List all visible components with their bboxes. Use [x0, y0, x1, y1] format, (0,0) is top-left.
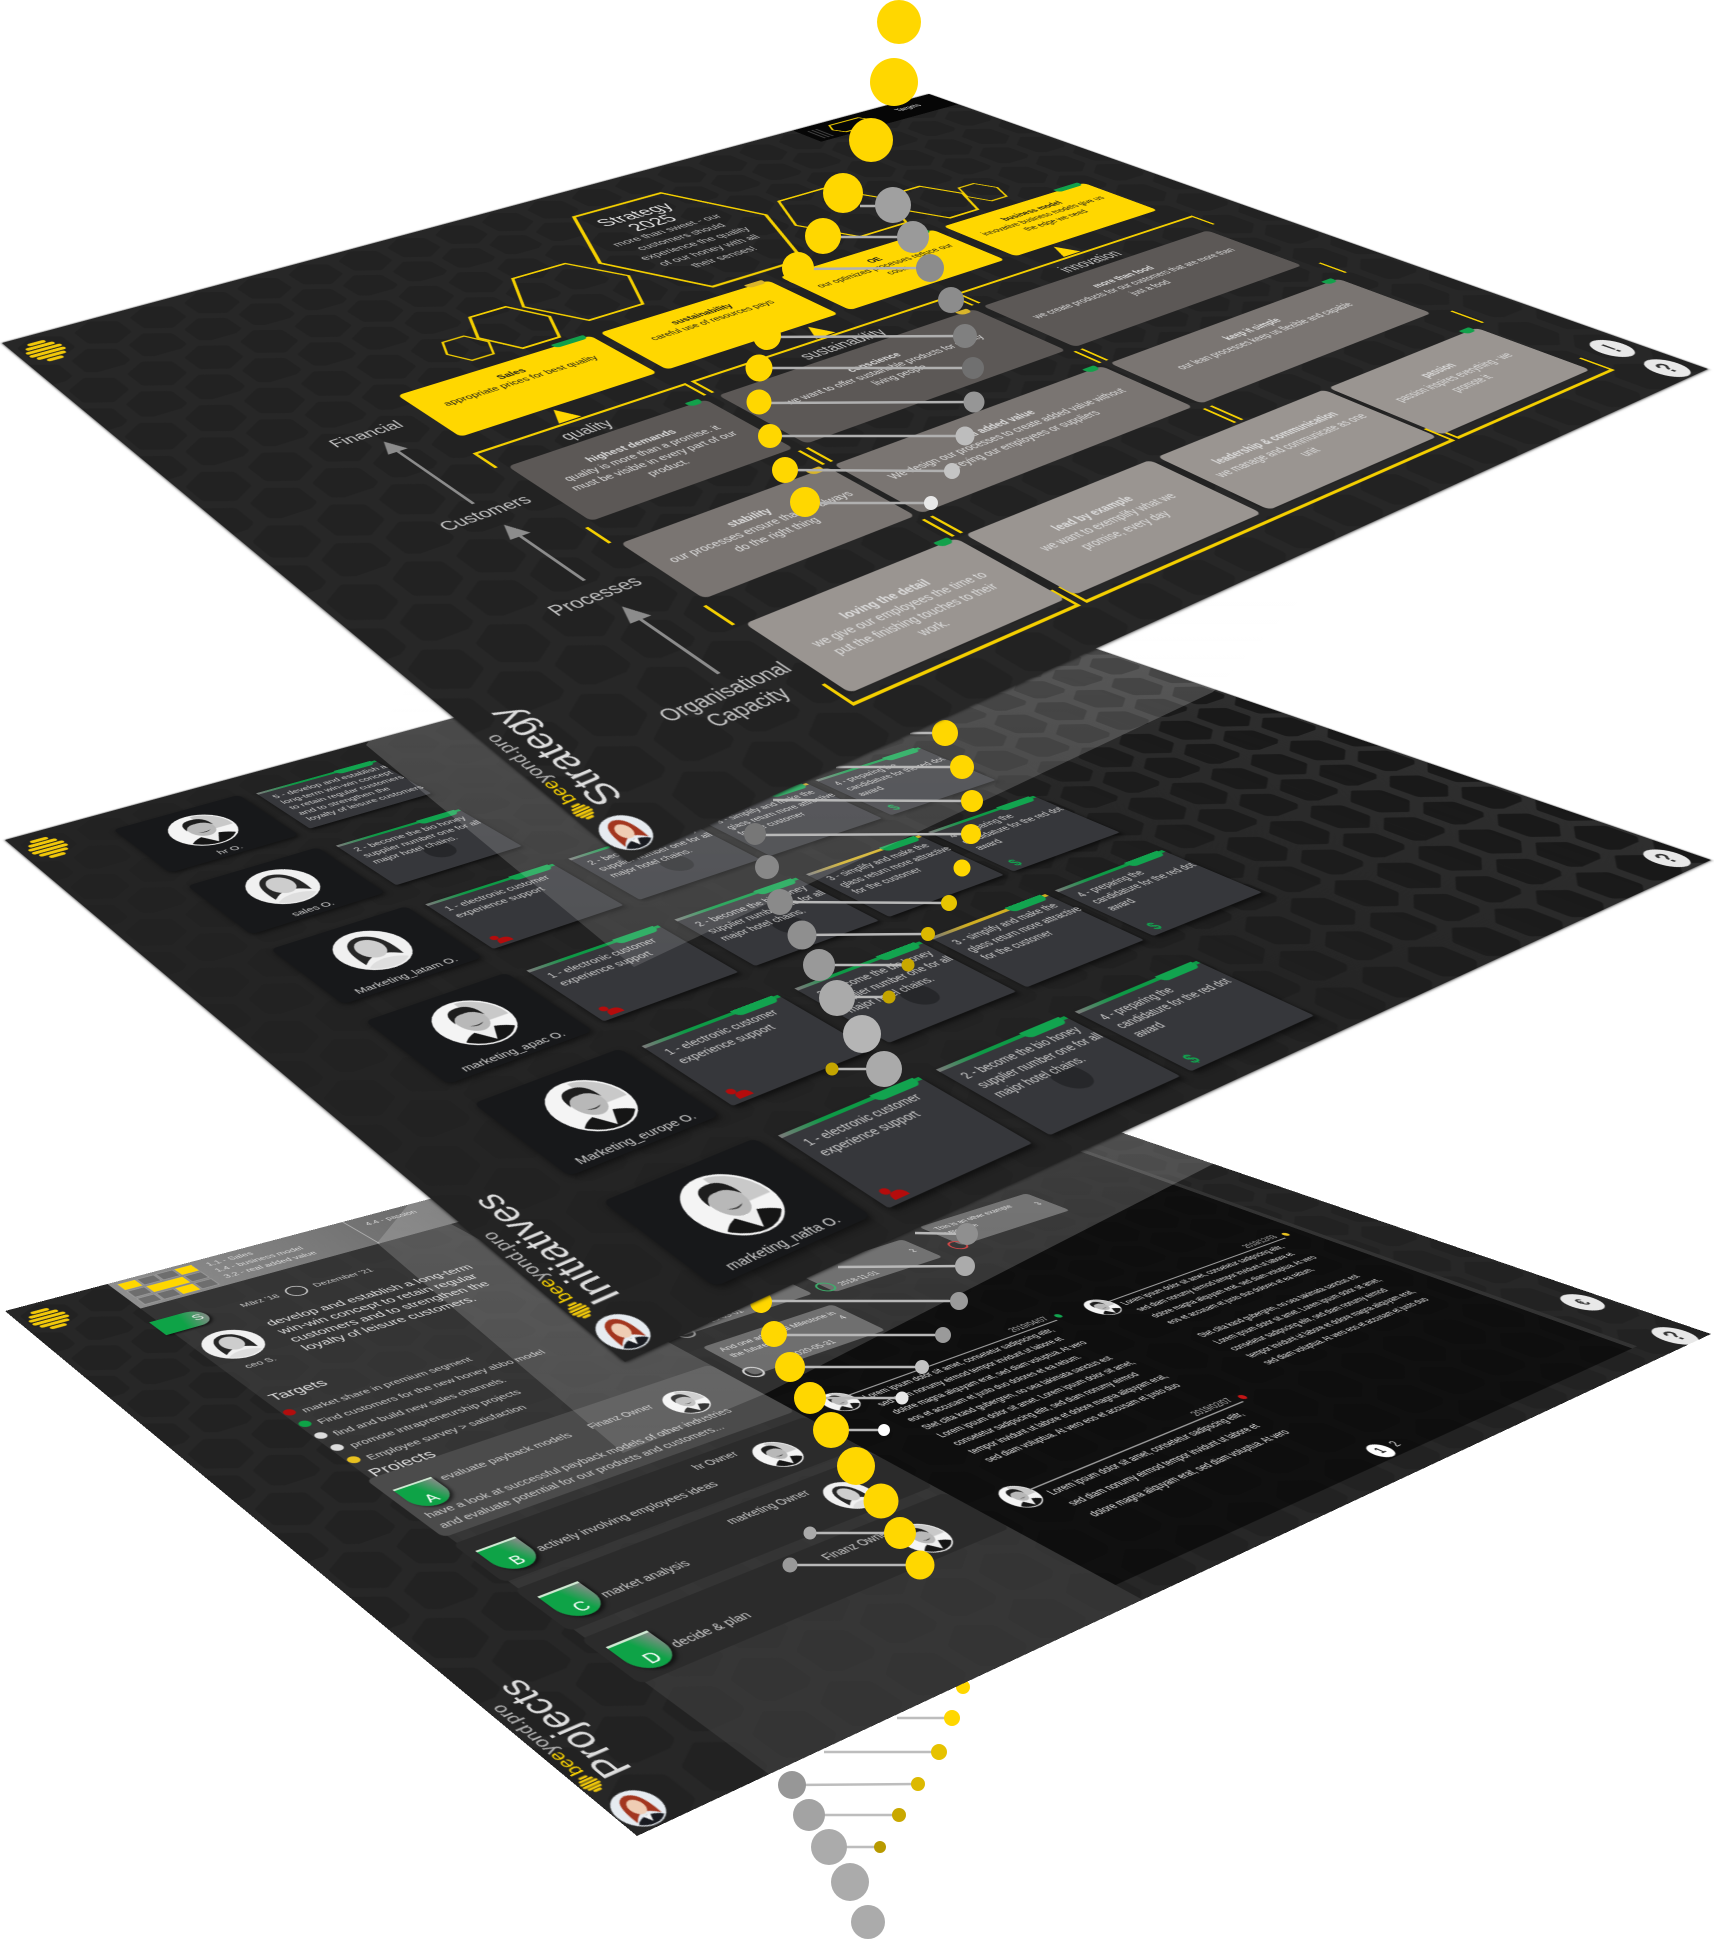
column label: sustainability: sustainability: [794, 327, 891, 362]
card: sales bio honey: [336, 809, 522, 885]
tab A: A: [420, 1491, 444, 1505]
card: OE: costs: [883, 265, 913, 276]
card: apac preparing: candidature for the red dot: [958, 806, 1067, 845]
milestone 4: 2020-05-31: [787, 1338, 839, 1358]
project row B: [452, 1417, 862, 1583]
card: sustainability: sustainability: [668, 303, 736, 326]
card: more than food: more than food: [1089, 265, 1158, 289]
card: europe preparing: candidature for the red dot: [1088, 862, 1200, 905]
owner tile: nafta: [602, 1138, 871, 1287]
card: highest demands: quality is more than a promise. it: [561, 424, 724, 483]
card: lead by example: [965, 460, 1262, 595]
card: europe preparing: award: [1103, 897, 1140, 912]
sidebar title: initiatives: Initiatives: [462, 1189, 631, 1310]
green S tab: S: [188, 1313, 208, 1322]
milestone 3: Milestone: [942, 1222, 981, 1236]
card: nafta bio honey: supplier number one for all: [973, 1031, 1107, 1090]
avatar: hr owner: [752, 1442, 804, 1468]
icon: sidebar logo: [577, 1774, 603, 1792]
comment 1: sed diam nonumy eirmod tempor invidunt ut labore et: [874, 1336, 1067, 1408]
card: sales: Sales: [493, 367, 529, 381]
tab A: [392, 1477, 459, 1511]
card: nafta bio honey: [936, 1016, 1180, 1135]
card: leadership and communication: [1157, 390, 1437, 510]
card: nafta electronic: [778, 1077, 1032, 1208]
card: nafta preparing: candidature for the red dot: [1112, 977, 1236, 1031]
tab D: D: [638, 1649, 668, 1667]
comment 3: [1083, 1232, 1432, 1366]
card: apac simplify: [806, 835, 1004, 917]
project row D: [580, 1492, 1010, 1684]
card: latam simplify: [696, 783, 882, 856]
milestone 4: 4: [835, 1314, 849, 1320]
project row C: [514, 1453, 934, 1631]
card: apac bio honey: [674, 878, 879, 966]
sidebar title: projects: Projects: [487, 1674, 642, 1784]
card: latam bio honey: [568, 821, 760, 900]
card: apac bio honey: supplier number one for all: [705, 889, 829, 935]
project row C: marketing Owner: [722, 1488, 813, 1526]
target list: market share in premium segment: [299, 1356, 475, 1414]
panel: initiatives plane: [5, 590, 1711, 1362]
row label: financial: Financial: [325, 419, 407, 450]
card: latam electronic: [425, 864, 623, 949]
milestone 3: This is an other example: [931, 1204, 1015, 1231]
owner tile: latam: Marketing_latam O.: [352, 955, 461, 996]
card: highest demands: must be visible in every part of our: [568, 429, 741, 493]
card: nafta preparing: $: [1178, 1052, 1206, 1066]
card: real added value: [834, 366, 1193, 513]
card: europe bio honey: major hotel chains.: [842, 975, 939, 1015]
card: apac preparing: 4 - preparing the: [945, 813, 1018, 839]
card: lead by example: promise, every day: [1076, 509, 1175, 552]
icon: help button: ?: [1654, 1328, 1695, 1343]
card: europe simplify: for the customer: [978, 929, 1057, 962]
card: leadership and communication: leadership & communication: [1208, 410, 1343, 466]
milestone 3: 3: [1031, 1201, 1044, 1206]
target list: Find customers for the new honey abbo model: [314, 1349, 548, 1426]
milestone 4: And one additional Milestone in: [716, 1310, 839, 1353]
objective text: develop and establish a long-term win-win concept to retain regular customers and to strengthen the loyalty of leisure customers.: [263, 1263, 494, 1352]
strategy hexagon text: customers should: [633, 222, 729, 252]
icon: language button: [1552, 1291, 1613, 1314]
top navigation bar: Targets: [892, 103, 924, 112]
card: conscience: living people: [868, 363, 931, 387]
strategy hexagon text: Strategy: [591, 200, 678, 229]
card: europe simplify: glass return more attractive: [963, 905, 1086, 954]
card: hr develop: to retain regular customers: [287, 774, 407, 811]
card: europe electronic: [642, 995, 872, 1106]
mini map legend: 1.4 - business model: [212, 1245, 306, 1273]
comment 1: dolore magna aliquyam erat, sed diam voluptua. At vero: [889, 1340, 1090, 1415]
comment 1: Stet clita kasd gubergren, no sea takimata sanctus est: [918, 1355, 1116, 1431]
milestone 4: the future: [726, 1342, 772, 1359]
icon: help button: [1644, 1324, 1707, 1348]
top navigation bar: [793, 94, 958, 142]
card: stability: do the right thing: [730, 515, 824, 554]
icon: help button: [1636, 356, 1699, 380]
card: keep it simple: [1110, 279, 1431, 404]
card: stability: [620, 467, 915, 599]
card: europe bio honey: supplier number one for all: [828, 955, 957, 1006]
row label: organisational capacity: Organisational: [653, 659, 797, 726]
mini map legend: 3.2 - real added value: [221, 1250, 319, 1279]
card: more than food: [983, 230, 1302, 347]
project row A: and evaluate potential for our products and customers...: [435, 1423, 728, 1530]
owner tile: sales: [187, 847, 385, 934]
comment 3: sed diam nonumy eirmod tempor invidunt ut labore et: [1133, 1252, 1298, 1312]
card: sustainability: careful use of resources pays: [647, 299, 778, 342]
milestone 2: 2018-11-01: [834, 1270, 882, 1287]
project row B: hr Owner: [689, 1450, 741, 1472]
header with strategy mini map: 4.4 - passion: [362, 1209, 419, 1226]
card: OE: OE: [863, 256, 886, 264]
strategy hexagon text: of our honey with all: [655, 233, 764, 268]
card: europe simplify: 3 - simplify and make the: [949, 902, 1062, 947]
avatar: user: [588, 798, 654, 851]
comment 3: tempor invidunt ut labore et dolore magna aliquyam erat,: [1243, 1289, 1419, 1359]
card: real added value: preying our employees or suppliers: [944, 409, 1104, 472]
card: apac electronic: 1 - electronic customer: [544, 937, 660, 980]
avatar: ceo: [200, 1330, 266, 1359]
card: business model: business model: [998, 200, 1066, 222]
milestone 4: [702, 1304, 886, 1375]
target list: promote intrapreneurship projects: [347, 1388, 524, 1450]
card: europe bio honey: 2 - become the bio honey: [814, 949, 937, 998]
comment 1: consetetur sadipscing elitr, sed diam nonumy eirmod: [949, 1371, 1142, 1447]
heading: targets: Targets: [264, 1377, 331, 1403]
card: apac simplify: for the customer: [849, 867, 926, 895]
target list: [282, 1349, 548, 1464]
pager: 2: [1384, 1439, 1406, 1448]
avatar: marketing owner: [822, 1482, 869, 1510]
card: sales bio honey: supplier number one for all: [361, 819, 484, 859]
arrow: customers to financial: [383, 442, 476, 504]
tab D: [606, 1630, 684, 1674]
milestone 2: 2: [906, 1248, 919, 1253]
card: keep it simple: our lean processes keep us flexible and capable: [1173, 301, 1357, 371]
card: conscience: conscience: [843, 351, 905, 374]
card: stability: our processes ensure that we always: [665, 489, 857, 565]
mini map legend: 1.1 - Sales: [203, 1251, 255, 1267]
owner tile: apac: marketing_apac O.: [457, 1029, 569, 1074]
icon: info button: [1582, 337, 1643, 360]
panel: strategy plane: [2, 94, 1708, 862]
avatar: user: [609, 1790, 668, 1828]
card: OE: our optimized processes reduce our: [813, 243, 957, 289]
icon: help button: ?: [1646, 851, 1687, 866]
mini map: [118, 1265, 220, 1304]
card: apac preparing: $: [1004, 858, 1027, 868]
comment 2: sed diam nonumy eirmod tempor invidunt ut labore et: [1064, 1422, 1263, 1507]
card: hr develop: loyalty of leisure customers: [304, 784, 426, 822]
owner tile: europe: Marketing_europe O.: [571, 1111, 701, 1167]
card: apac electronic: experience support: [556, 950, 656, 988]
owner tile: europe: [473, 1048, 720, 1176]
avatar: user: [594, 1314, 652, 1350]
card: leadership and communication: we manage and communicate as one: [1211, 412, 1372, 479]
card: latam preparing: $: [884, 803, 905, 812]
owner tile: latam: [271, 906, 483, 1004]
green S tab: [149, 1309, 216, 1335]
owner tile: hr: hr O.: [214, 844, 246, 856]
row label: customers: Customers: [434, 493, 536, 534]
project row A: evaluate payback models: [436, 1431, 576, 1482]
card: highest demands: [508, 400, 793, 521]
card: passion: [1328, 328, 1590, 435]
card: lead by example: lead by example: [1047, 494, 1138, 533]
card: keep it simple: keep it simple: [1219, 317, 1285, 342]
card: leadership and communication: unit: [1295, 446, 1324, 458]
card: europe electronic: 1 - electronic customer: [661, 1008, 782, 1057]
project row A: have a look at successful payback models of other industries: [422, 1407, 736, 1520]
card: highest demands: product.: [644, 458, 693, 478]
icon: help button: [1635, 846, 1699, 871]
card: latam simplify: 3 - simplify and make the: [712, 789, 819, 825]
date row: März '18 Dezember '21: [237, 1267, 375, 1308]
caption: ceo: ceo S.: [242, 1355, 279, 1370]
card: latam bio honey: major hotel chains.: [607, 848, 696, 879]
card: loving the detail: loving the detail: [836, 577, 935, 621]
project row B: actively involving employees ideas: [532, 1479, 722, 1554]
card: nafta electronic: experience support: [815, 1109, 925, 1159]
comment 1: Lorem ipsum dolor sit amet, consetetur sadipscing elitr,: [860, 1327, 1057, 1400]
column label: quality: quality: [555, 417, 618, 443]
card: nafta bio honey: 2 - become the bio honey: [957, 1025, 1085, 1081]
card: europe bio honey: [794, 941, 1016, 1043]
comment 1: 2019/04/07: [1005, 1316, 1052, 1333]
tab C: C: [568, 1598, 596, 1615]
sidebar title: strategy: Strategy: [479, 702, 634, 811]
comment 3: Stet clita kasd gubergren, no sea takimata sanctus est: [1194, 1274, 1363, 1338]
card: europe preparing: $: [1142, 921, 1167, 932]
card: passion: passion inspires everything - we: [1391, 351, 1517, 404]
card: latam preparing: candidature for the red dot: [843, 757, 948, 792]
card: europe electronic: experience support: [675, 1023, 779, 1066]
card: europe preparing: 4 - preparing the: [1073, 869, 1149, 899]
project row D: decide & plan: [667, 1610, 756, 1650]
card: hr develop: long-term win-win concept: [279, 770, 395, 805]
card: nafta preparing: 4 - preparing the: [1096, 986, 1179, 1022]
card: sales bio honey: 2 - become the bio honey: [351, 815, 469, 853]
card: apac preparing: [928, 796, 1120, 871]
card: latam preparing: [815, 747, 996, 815]
card: nafta preparing: [1075, 961, 1314, 1071]
card: latam preparing: award: [855, 785, 888, 797]
card: nafta preparing: award: [1129, 1021, 1170, 1039]
sidebar brand: beeyond.pro: [478, 1229, 579, 1305]
comment 2: [998, 1394, 1293, 1518]
card: more than food: we create products for our customers that are more than: [1029, 247, 1239, 320]
card: nafta bio honey: major hotel chains.: [990, 1055, 1090, 1100]
comment 3: Lorem ipsum dolor sit amet, consetetur sadipscing elitr,: [1118, 1244, 1287, 1306]
card: latam electronic: 1 - electronic customer: [442, 874, 553, 913]
card: apac electronic: [526, 925, 738, 1021]
icon: info button: !: [1594, 342, 1629, 355]
comment 3: eos et accusam et justo duo dolores et ea rebum.: [1163, 1267, 1318, 1325]
card: business model: innovative business models give us: [978, 195, 1108, 237]
owner tile: apac: [365, 973, 593, 1084]
comment 1: [824, 1300, 1184, 1464]
card: business model: [943, 183, 1157, 256]
card: business model: the edge we need: [1020, 209, 1091, 232]
card: highest demands: highest demands: [582, 428, 680, 464]
project row D: Finanz Owner: [818, 1528, 895, 1562]
comment 3: consetetur sadipscing elitr, sed diam nonumy eirmod: [1226, 1287, 1391, 1352]
owner tile: hr: [113, 795, 299, 873]
comment 2: Lorem ipsum dolor sit amet, consetetur sadipscing elitr,: [1044, 1411, 1248, 1496]
header with strategy mini map: [107, 1067, 973, 1309]
arrow: processes to customers: [504, 524, 586, 582]
card: hr develop: [256, 760, 431, 829]
card: apac simplify: 3 - simplify and make the: [823, 842, 933, 882]
icon: logo: [25, 340, 67, 362]
target list: Employee survey > satisfaction: [363, 1403, 530, 1462]
strategy hexagon text: more than sweet - our: [609, 213, 725, 248]
hexagon decorations and column brackets: [441, 183, 1616, 706]
card: real added value: real added value: [953, 408, 1039, 442]
tab B: B: [505, 1553, 531, 1568]
row label: processes: Processes: [543, 573, 647, 619]
pager: 1: [1370, 1446, 1391, 1455]
milestone 2: [795, 1239, 943, 1292]
milestone 1: 2019-03-01: [695, 1308, 746, 1326]
comment 1: eos et accusam et justo duo dolores et ea rebum.: [903, 1354, 1085, 1423]
icon: logo: [28, 1308, 70, 1330]
comment 2: 2019/02/07: [1187, 1397, 1236, 1417]
icon: logo: [28, 836, 69, 858]
card: latam electronic: experience support: [452, 886, 548, 919]
project row A: [366, 1365, 795, 1538]
card: stability: stability: [723, 506, 776, 529]
card: latam simplify: for the customer: [735, 811, 809, 837]
icons: milestone clocks: [680, 1241, 969, 1378]
comment 3: 2019/12/03: [1239, 1234, 1281, 1249]
card: passion: passion: [1416, 361, 1461, 379]
project row A: Finanz Owner: [584, 1403, 656, 1430]
milestone 1: [641, 1274, 813, 1336]
card: apac bio honey: 2 - become the bio honey: [692, 885, 811, 928]
card: sales: [397, 336, 657, 437]
owner tile: nafta: marketing_nafta O.: [721, 1213, 845, 1273]
card: sales bio honey: major hotel chains.: [370, 835, 461, 865]
card: nafta electronic: 1 - electronic customer: [800, 1092, 926, 1148]
column label: innovation: innovation: [1054, 249, 1126, 274]
comment 1: sed diam voluptua. At vero eos et accusam et justo duo: [981, 1382, 1184, 1464]
row label: organisational capacity: Capacity: [700, 684, 796, 731]
strategy hexagon text: experience the quality: [637, 226, 754, 262]
card: loving the detail: work.: [913, 618, 955, 638]
card: more than food: just a food: [1126, 279, 1175, 296]
project row C: market analysis: [597, 1558, 694, 1600]
card: latam bio honey: supplier number one for all: [596, 832, 716, 873]
comment 3: Lorem ipsum dolor sit amet. Lorem ipsum dolor sit amet,: [1210, 1277, 1385, 1345]
card: real added value: We design our processes to create added value without: [884, 387, 1130, 481]
card: OE: [780, 230, 1005, 310]
sidebar brand: beeyond.pro: [487, 1702, 589, 1779]
icon: sidebar logo: [566, 1301, 592, 1319]
card: passion: promote it: [1447, 373, 1497, 394]
sidebar brand: beeyond.pro: [481, 732, 582, 806]
pager: [1365, 1439, 1406, 1458]
card: loving the detail: we give our employees the time to: [807, 570, 992, 649]
card: apac simplify: glass return more attractive: [836, 845, 955, 889]
heading: projects: Projects: [363, 1448, 441, 1479]
avatar: finance owner D: [908, 1524, 954, 1553]
arrow: organisational capacity to processes: [621, 606, 721, 674]
comment 1: tempor invidunt ut labore et dolore magna aliquyam erat,: [965, 1373, 1171, 1455]
card: loving the detail: put the finishing touches to their: [829, 581, 1002, 657]
icon: language button: €: [1568, 1297, 1596, 1307]
icon: help button: ?: [1647, 360, 1687, 376]
card: apac preparing: award: [972, 838, 1006, 852]
strategy hexagon text: [591, 200, 764, 269]
card: hr develop: and to strengthen the: [296, 786, 393, 816]
milestone 3: [919, 1193, 1070, 1245]
tab C: [537, 1581, 612, 1622]
card: europe simplify: [930, 894, 1144, 987]
card: conscience: we want to offer sustainable products for quality: [781, 333, 988, 406]
strategy hexagon text: their senses!: [687, 245, 761, 269]
card: conscience: [718, 309, 1066, 444]
panel: projects plane: [5, 1067, 1711, 1836]
card: lead by example: we want to exemplify what we: [1036, 491, 1181, 553]
card: sales: appropriate prices for best quality: [440, 354, 601, 408]
tab B: [475, 1537, 547, 1574]
card: loving the detail: [745, 538, 1065, 693]
card: apac bio honey: major hotel chains.: [717, 908, 810, 943]
comment 2: dolore magna aliquyam erat, sed diam voluptua. At vero: [1085, 1428, 1293, 1518]
card: hr develop: 5 - develop and establish a: [270, 764, 390, 800]
target list: find and build new sales channels.: [330, 1377, 510, 1438]
card: europe preparing: [1055, 850, 1262, 936]
icon: sidebar logo: [570, 802, 595, 820]
avatar: finance owner: [662, 1390, 712, 1414]
card: latam simplify: glass return more attractive: [724, 792, 839, 831]
comment 1: Lorem ipsum dolor sit amet. Lorem ipsum dolor sit amet,: [934, 1359, 1138, 1439]
owner tile: sales: sales O.: [289, 899, 338, 918]
card: sustainability: [600, 281, 838, 370]
comment 3: dolore magna aliquyam erat, sed diam voluptua. At vero: [1148, 1255, 1320, 1319]
card: latam preparing: 4 - preparing the: [831, 763, 901, 787]
comment 3: sed diam voluptua. At vero eos et accusam et justo duo: [1259, 1296, 1432, 1366]
card: latam bio honey: 2 - become the bio honey: [585, 827, 699, 866]
strategy hexagon text: 2025: [622, 212, 682, 233]
milestone 1: 1: [773, 1283, 787, 1288]
